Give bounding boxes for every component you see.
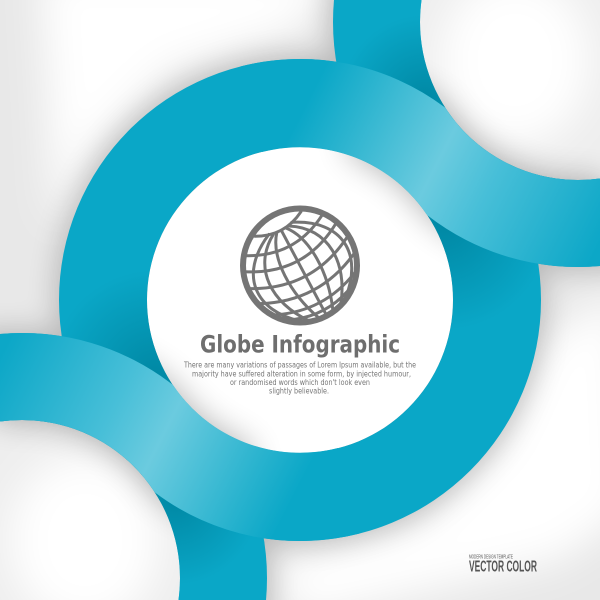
body text: There are many variations of passages of Lorem Ipsum available, but the (183, 361, 416, 370)
template caption: MODERN DESIGN TEMPLATE (469, 554, 513, 560)
ribbon ring: bottom left, underlying (0, 333, 267, 600)
body text: majority have suffered alteration in some form, by injected humour, (192, 369, 411, 378)
ribbon band: left to bottom (0, 333, 360, 541)
title: Globe Infographic (200, 330, 400, 358)
body text (183, 361, 416, 395)
white circle: top right (420, 0, 600, 180)
ribbon ring: top right, underlying (333, 0, 600, 267)
icon: globe (229, 198, 374, 340)
white circle: center (147, 147, 453, 453)
body text: or randomised words which don't look even (230, 378, 370, 387)
white circle: bottom left (0, 420, 180, 600)
template caption (469, 554, 537, 576)
body text: slightly believable. (269, 386, 329, 395)
central ring (59, 59, 541, 541)
ribbon band: top to right (240, 59, 600, 267)
template caption: VECTOR COLOR (469, 559, 537, 576)
